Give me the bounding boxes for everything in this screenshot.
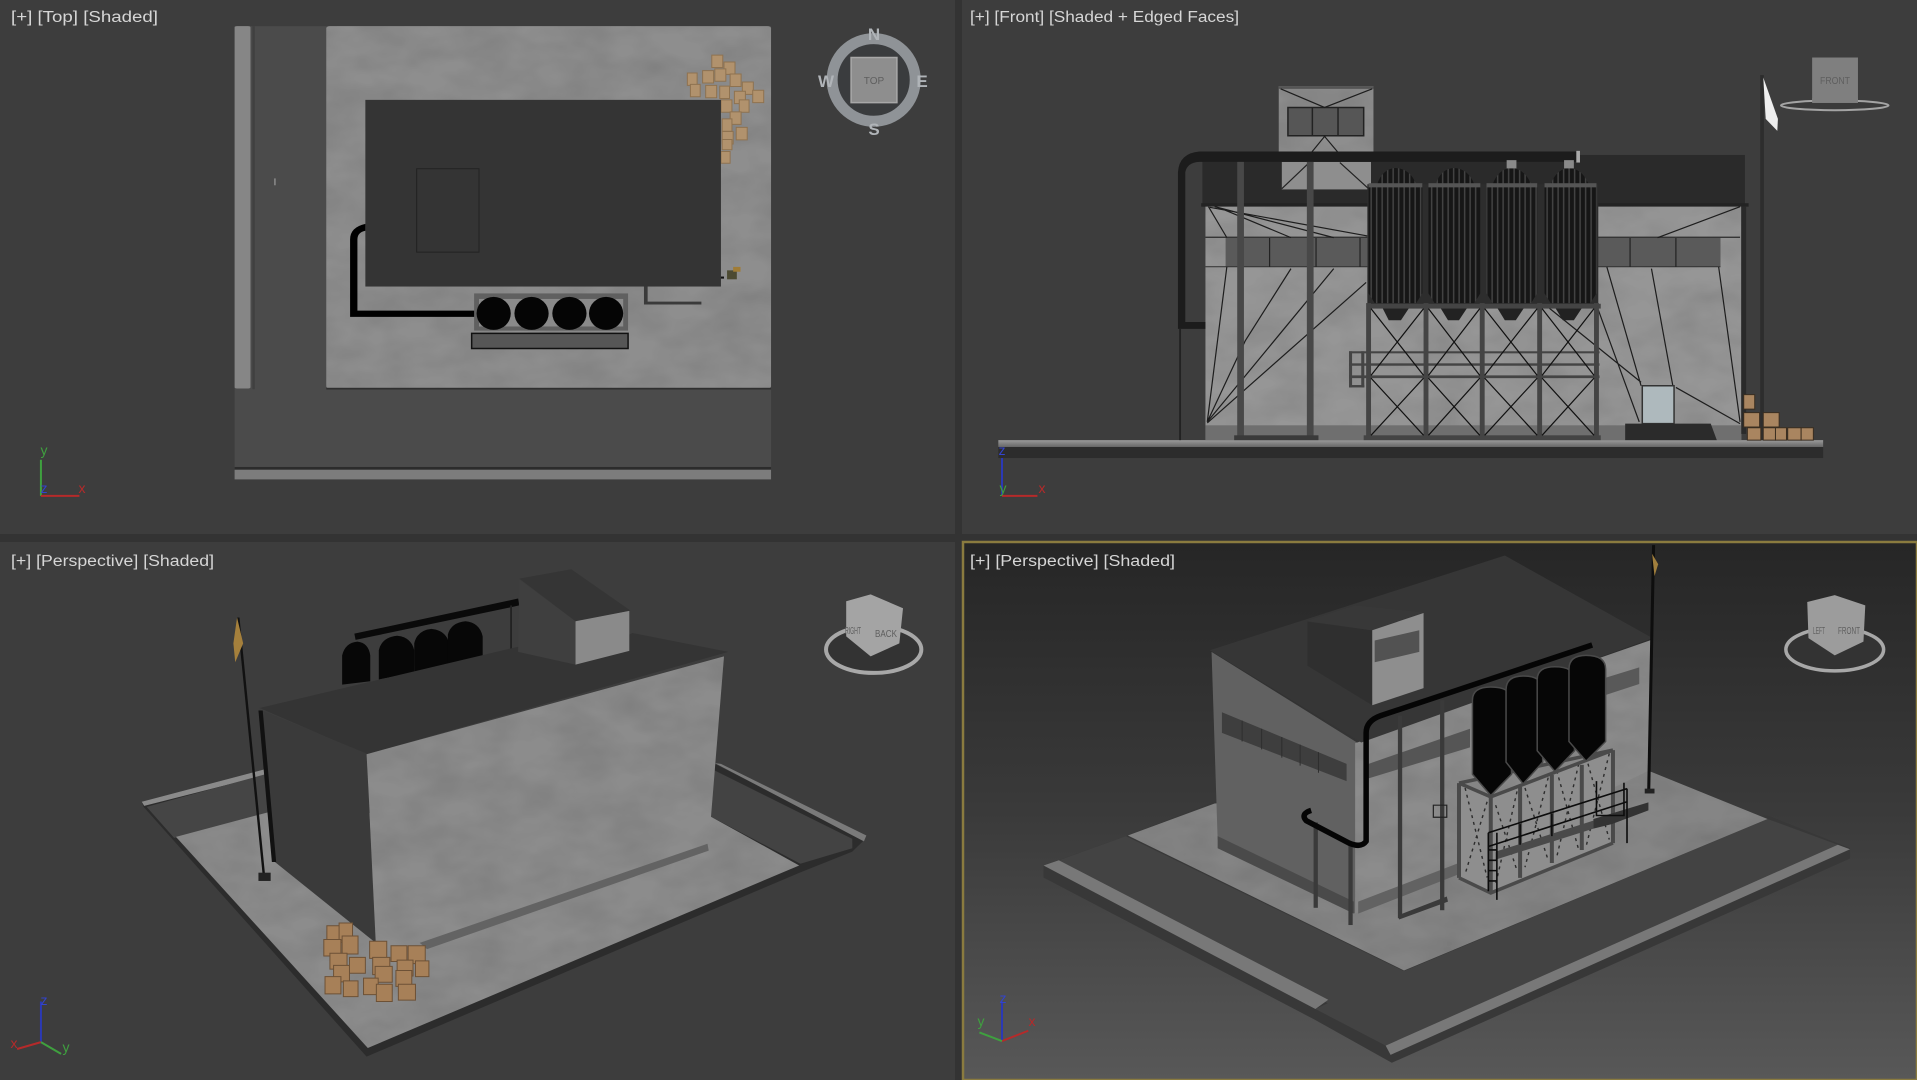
back cube text: BACK bbox=[875, 629, 897, 640]
silos bbox=[1472, 655, 1606, 796]
pipe bbox=[354, 599, 519, 640]
railing and ladder bbox=[1488, 781, 1627, 900]
compass ring bbox=[832, 39, 915, 121]
small wall hatch bbox=[1433, 805, 1447, 817]
right wall bbox=[1355, 640, 1651, 914]
panel: active perspective viewport bbox=[963, 542, 1917, 1080]
silo support frame bbox=[1349, 303, 1601, 440]
front view cube bbox=[1781, 58, 1889, 110]
boxes cluster bbox=[324, 923, 429, 1001]
top view boxes bbox=[687, 55, 764, 163]
poles bbox=[1314, 700, 1448, 925]
equipment beam bbox=[1496, 802, 1648, 860]
perspective view cube bbox=[1786, 595, 1884, 671]
flag and pole bbox=[1741, 75, 1778, 440]
roof bbox=[1210, 555, 1653, 743]
perspective cube text bbox=[1813, 626, 1860, 637]
penthouse bbox=[518, 569, 631, 665]
pipe bbox=[350, 224, 478, 317]
front boxes bbox=[1744, 395, 1813, 440]
flag pole and flag bbox=[233, 617, 271, 881]
compass letters: N bbox=[868, 25, 880, 44]
label: back perspective viewport: [+] [Perspective] [Shaded] bbox=[11, 553, 214, 570]
back cube text: RIGHT bbox=[845, 626, 861, 637]
dark side wall bbox=[260, 709, 376, 943]
roof bbox=[365, 100, 721, 287]
front axis letters: z bbox=[998, 442, 1006, 458]
penthouse bbox=[1279, 86, 1373, 189]
silo backing bbox=[1367, 184, 1598, 305]
front axis letters: y bbox=[1000, 480, 1006, 496]
rooftop penthouse outline bbox=[417, 169, 479, 252]
top view site plan bbox=[235, 26, 771, 479]
label: front viewport: [+] [Front] [Shaded + Edged Faces] bbox=[970, 9, 1239, 26]
silos bbox=[1369, 160, 1596, 320]
front axis gizmo bbox=[1002, 458, 1037, 496]
top axis letters: z bbox=[40, 480, 48, 496]
top axis letters bbox=[40, 442, 86, 496]
rear pole line bbox=[258, 710, 276, 862]
drain pipe and columns bbox=[1178, 151, 1580, 440]
ground strip bbox=[998, 440, 1823, 458]
wall wireframe edges bbox=[1207, 207, 1740, 424]
silo platform bbox=[472, 293, 628, 349]
perspective axis letters: y bbox=[978, 1013, 984, 1029]
building wall bbox=[1205, 207, 1741, 440]
silo frame bbox=[1459, 750, 1613, 893]
back axis letters: y bbox=[62, 1039, 70, 1055]
left wall bbox=[1212, 652, 1358, 914]
compass letters: E bbox=[916, 72, 928, 91]
perspective axis letters: x bbox=[1028, 1013, 1036, 1029]
perspective axis gizmo bbox=[979, 1001, 1028, 1041]
panel: back perspective viewport bbox=[0, 542, 955, 1080]
back axis letters: x bbox=[10, 1035, 18, 1051]
compass letters: W bbox=[818, 72, 835, 91]
back axis letters: z bbox=[40, 992, 48, 1008]
perspective cube text: LEFT bbox=[1813, 626, 1825, 637]
silos behind roof bbox=[342, 621, 483, 685]
top axis gizmo bbox=[41, 460, 79, 496]
compass letters: TOP bbox=[864, 76, 885, 87]
perspective axis letters: z bbox=[1000, 990, 1006, 1006]
label: top viewport: [+] [Top] [Shaded] bbox=[11, 9, 158, 26]
compass letters bbox=[818, 25, 928, 139]
front axis letters: x bbox=[1038, 480, 1046, 496]
compass letters: S bbox=[868, 120, 880, 139]
panel: top view viewport bbox=[0, 0, 955, 534]
perspective cube text: FRONT bbox=[1838, 626, 1860, 637]
perspective axis letters bbox=[978, 990, 1036, 1029]
top axis letters: x bbox=[78, 480, 86, 496]
back view cube bbox=[826, 594, 921, 673]
main wall bbox=[367, 656, 724, 943]
site base bbox=[142, 763, 866, 1057]
main roof fascia bbox=[1202, 155, 1745, 207]
flag and pole bbox=[1645, 545, 1658, 793]
front cube text: FRONT bbox=[1820, 76, 1850, 87]
base strip bbox=[420, 844, 709, 949]
door and step bbox=[1625, 386, 1717, 440]
penthouse bbox=[1306, 605, 1424, 705]
label: active perspective viewport: [+] [Perspective] [Shaded] bbox=[970, 553, 1175, 570]
top axis letters: y bbox=[40, 442, 48, 458]
back cube text bbox=[845, 626, 897, 640]
site base bbox=[1044, 771, 1850, 1063]
back axis gizmo bbox=[17, 1001, 61, 1054]
black pipe bbox=[1304, 645, 1592, 845]
back axis letters bbox=[10, 992, 70, 1055]
panel: front view viewport bbox=[962, 0, 1917, 534]
roof bbox=[260, 633, 728, 754]
front axis letters bbox=[998, 442, 1046, 496]
